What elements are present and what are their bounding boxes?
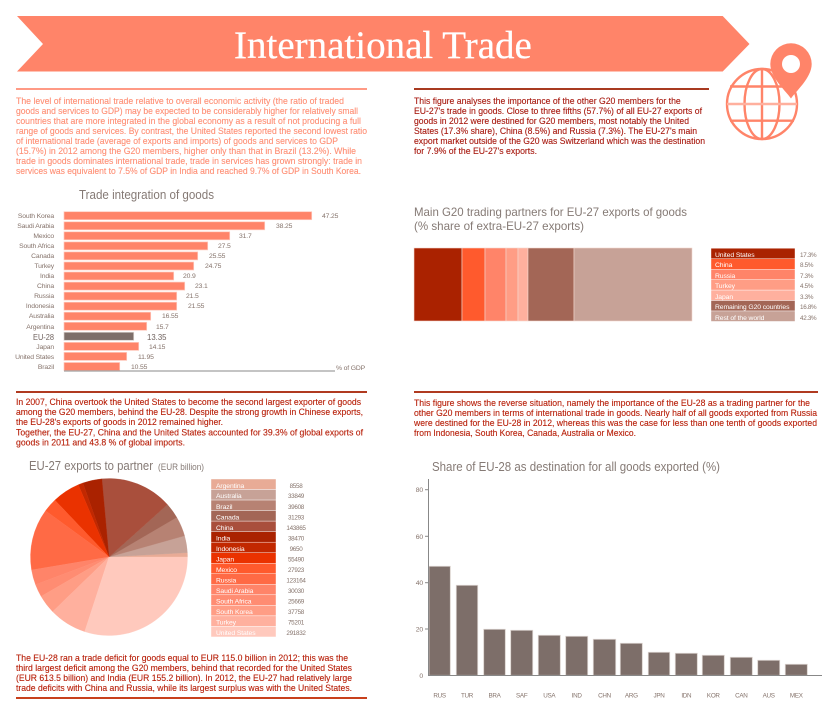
legend: EU-27 exports to partner: South Korea xyxy=(216,609,253,616)
icon: globe with location pin xyxy=(727,43,812,139)
legend: EU-27 exports to partner: China xyxy=(216,525,234,532)
legend: G20 trading partners: Remaining G20 countries xyxy=(715,304,790,311)
legend: G20 trading partners: United States xyxy=(715,252,755,259)
legend: EU-27 exports to partner: Argentina xyxy=(216,483,245,490)
legend: EU-27 exports to partner: Mexico xyxy=(216,567,237,574)
bar chart: trade integration of goods: 16.55 xyxy=(162,313,179,320)
bar chart: trade integration of goods: 27.5 xyxy=(218,243,231,250)
legend: EU-27 exports to partner: 38470 xyxy=(288,536,305,542)
bar chart: trade integration of goods: South Africa xyxy=(19,243,54,250)
bar chart: trade integration of goods: 25.55 xyxy=(209,253,226,260)
legend: G20 trading partners: Turkey xyxy=(715,283,736,290)
panel: intro text left: The level of international trade relative to overall economic activity (the ratio of traded xyxy=(16,95,344,106)
bar chart: trade integration of goods: 20.9 xyxy=(183,273,196,280)
panel: intro text left: services was equivalent to 7.5% of GDP in India and reached 9.7% of GDP in South Korea. xyxy=(16,165,361,176)
bar chart: share of EU-28 as destination: 80 xyxy=(416,487,423,494)
bar chart: share of EU-28 as destination: KOR xyxy=(707,692,720,700)
bar chart: trade integration of goods: 21.5 xyxy=(186,293,199,300)
pie chart: EU-27 exports to partner xyxy=(30,478,188,636)
bar chart: share of EU-28 as destination: ARG xyxy=(625,692,638,700)
bar chart: share of EU-28 as destination: AUS xyxy=(763,692,775,700)
legend: G20 trading partners: Russia xyxy=(715,273,735,280)
legend: EU-27 exports to partner: Japan xyxy=(216,556,234,564)
bar chart: share of EU-28 as destination: 20 xyxy=(416,626,423,634)
bar chart: trade integration of goods: 13.35 xyxy=(147,332,167,342)
legend: EU-27 exports to partner: 25669 xyxy=(288,598,305,606)
panel: intro text left: goods and services to GDP) may be expected to be considerably higher for relatively small xyxy=(16,105,358,116)
bar chart: trade integration of goods: 11.95 xyxy=(138,354,154,361)
bar chart: trade integration of goods: 23.1 xyxy=(195,283,208,290)
bar chart: trade integration of goods: 31.7 xyxy=(239,233,252,240)
bar chart: trade integration of goods: South Korea xyxy=(18,213,54,220)
legend: EU-27 exports to partner: Indonesia xyxy=(216,546,245,553)
panel: intro text right: States (17.3% share), China (8.5%) and Russia (7.3%). The EU-27's main xyxy=(414,125,697,136)
panel: intro text right: EU-27's trade in goods. Close to three fifths (57.7%) of all EU-27 exports of xyxy=(414,105,702,116)
stacked bar: G20 trading partners xyxy=(414,248,692,321)
panel: intro text right xyxy=(414,88,709,156)
heading: share of EU-28 chart: Share of EU-28 as destination for all goods exported (%) xyxy=(432,460,720,474)
bar chart: share of EU-28 as destination: IND xyxy=(572,692,582,700)
legend: G20 trading partners: 3.3% xyxy=(800,294,814,301)
legend: G20 trading partners: Japan xyxy=(715,294,733,301)
legend: G20 trading partners xyxy=(711,248,817,322)
heading: EU-27 exports pie chart: EU-27 exports to partner xyxy=(29,458,154,473)
bar chart: share of EU-28 as destination: 60 xyxy=(416,534,423,541)
panel: intro text left: (15.7%) in 2012 among the G20 members, higher only than that in Brazil (13.2%). While xyxy=(16,145,356,156)
bar chart: share of EU-28 as destination: TUR xyxy=(461,692,474,700)
legend: EU-27 exports to partner: 27923 xyxy=(288,567,305,574)
legend: EU-27 exports to partner: Russia xyxy=(216,578,236,584)
panel: China text: In 2007, China overtook the United States to become the second largest exporter of goods xyxy=(16,396,361,407)
panel: trade deficit text: (EUR 613.5 billion) and India (EUR 155.2 billion). In 2012, the EU-27 had relatively large xyxy=(16,672,352,683)
bar chart: share of EU-28 as destination: JPN xyxy=(654,692,665,700)
panel: China text: among the G20 members, behind the EU-28. Despite the strong growth in Chinese exports, xyxy=(16,406,363,417)
bar chart: trade integration of goods: EU-28 xyxy=(33,332,54,342)
legend: EU-27 exports to partner: 123164 xyxy=(286,578,306,584)
panel: China text: Together, the EU-27, China and the United States accounted for 39.3% of global exports of xyxy=(16,426,363,438)
bar chart: trade integration of goods: Russia xyxy=(34,293,54,300)
bar chart: share of EU-28 as destination: 40 xyxy=(416,580,423,587)
panel: reverse situation text xyxy=(413,391,818,438)
legend: G20 trading partners: China xyxy=(715,262,733,269)
bar chart: share of EU-28 as destination: SAF xyxy=(516,692,528,700)
panel: intro text right: for 7.9% of the EU-27's exports. xyxy=(414,145,537,156)
bar chart: share of EU-28 as destination: USA xyxy=(543,692,556,700)
panel: intro text left: range of goods and services. By contrast, the United States reported the second lowest ratio xyxy=(16,125,367,136)
legend: EU-27 exports to partner: 75201 xyxy=(288,620,305,626)
bar chart: trade integration of goods: Turkey xyxy=(34,263,55,270)
panel: trade deficit text xyxy=(16,652,367,699)
panel: intro text left: of international trade (average of exports and imports) of goods and services to GDP xyxy=(16,135,338,146)
legend: EU-27 exports to partner: 291832 xyxy=(286,630,306,637)
legend: G20 trading partners: 4.5% xyxy=(800,283,814,290)
bar chart: trade integration of goods: Argentina xyxy=(26,324,54,331)
panel: intro text left: trade in goods dominates international trade, trade in services has grown strongly: trade in xyxy=(16,155,362,166)
bar chart: share of EU-28 as destination: CAN xyxy=(735,692,748,700)
panel: intro text right: This figure analyses the importance of the other G20 members for the xyxy=(414,95,681,106)
panel: trade deficit text: third largest deficit among the G20 members, behind that recorded for the United States xyxy=(16,662,352,673)
title: International Trade xyxy=(234,24,532,67)
legend: G20 trading partners: 7.3% xyxy=(800,273,814,280)
legend: EU-27 exports to partner: 39608 xyxy=(288,504,305,511)
legend: G20 trading partners: Rest of the world xyxy=(715,315,765,322)
panel: intro text right: export market outside of the G20 was Switzerland which was the destination xyxy=(414,135,705,146)
panel: intro text left xyxy=(16,88,367,176)
bar chart: trade integration of goods: Indonesia xyxy=(26,303,54,310)
legend: EU-27 exports to partner: Turkey xyxy=(216,620,237,626)
legend: EU-27 exports to partner: 30030 xyxy=(288,588,305,595)
heading: main trading partners chart: Main G20 trading partners for EU-27 exports of goods xyxy=(414,205,687,219)
panel: intro text right: goods in 2012 were destined for G20 members, most notably the United xyxy=(414,115,689,126)
bar chart: trade integration of goods: United States xyxy=(15,354,55,361)
legend: EU-27 exports to partner: 143865 xyxy=(286,525,306,532)
bar chart: share of EU-28 as destination: BRA xyxy=(488,692,502,700)
title banner xyxy=(17,16,750,72)
bar chart: trade integration of goods: % of GDP xyxy=(336,365,366,372)
bar chart: trade integration of goods: 47.25 xyxy=(322,213,339,220)
bar chart: share of EU-28 as destination: CHN xyxy=(598,692,612,700)
bar chart: trade integration of goods: 38.25 xyxy=(276,223,293,230)
legend: EU-27 exports to partner: Australia xyxy=(216,493,242,500)
bar chart: trade integration of goods: Mexico xyxy=(33,233,54,240)
bar chart: trade integration of goods: 24.75 xyxy=(205,263,222,270)
panel: China text: the EU-28's exports of goods in 2012 remained higher. xyxy=(16,416,223,427)
bar chart: trade integration of goods: 21.55 xyxy=(188,303,205,310)
panel: China text xyxy=(16,391,367,448)
panel: intro text left: countries that are more integrated in the global economy as a result of not producing a full xyxy=(16,115,361,126)
legend: EU-27 exports to partner: 9650 xyxy=(290,546,303,553)
bar chart: share of EU-28 as destination: 0 xyxy=(419,673,423,680)
heading: trade integration chart: Trade integration of goods xyxy=(79,188,214,202)
bar chart: share of EU-28 as destination: MEX xyxy=(790,692,804,700)
legend: G20 trading partners: 17.3% xyxy=(800,252,817,259)
panel: reverse situation text: from Indonesia, South Korea, Canada, Australia or Mexico. xyxy=(414,427,636,438)
legend: EU-27 exports to partner: 55490 xyxy=(288,556,305,564)
bar chart: trade integration of goods: 10.55 xyxy=(131,364,148,371)
legend: EU-27 exports to partner: Brazil xyxy=(216,504,233,511)
panel: China text: goods in 2011 and 43.8 % of global imports. xyxy=(16,436,185,448)
legend: G20 trading partners: 8.5% xyxy=(800,262,814,269)
bar chart: trade integration of goods xyxy=(15,212,366,372)
legend: EU-27 exports to partner: United States xyxy=(216,630,256,637)
bar chart: trade integration of goods: Canada xyxy=(31,253,54,260)
panel: trade deficit text: The EU-28 ran a trade deficit for goods equal to EUR 115.0 billion in 2012; this was the xyxy=(16,652,348,663)
legend: EU-27 exports to partner: South Africa xyxy=(216,598,252,606)
heading: main trading partners chart xyxy=(414,205,687,233)
bar chart: trade integration of goods: India xyxy=(40,273,54,280)
legend: EU-27 exports to partner: Canada xyxy=(216,514,240,522)
legend: G20 trading partners: 42.3% xyxy=(800,315,817,322)
legend: EU-27 exports to partner: 33849 xyxy=(288,493,305,500)
heading: main trading partners chart: (% share of extra-EU-27 exports) xyxy=(414,219,584,233)
bar chart: trade integration of goods: China xyxy=(37,283,54,290)
bar chart: trade integration of goods: 14.15 xyxy=(149,344,166,351)
legend: EU-27 exports to partner xyxy=(211,479,306,637)
bar chart: share of EU-28 as destination xyxy=(416,479,822,700)
bar chart: share of EU-28 as destination: IDN xyxy=(681,692,692,700)
bar chart: trade integration of goods: Brazil xyxy=(38,364,55,371)
legend: G20 trading partners: 16.8% xyxy=(800,304,817,311)
panel: trade deficit text: trade deficits with China and Russia, while its largest surplus was with the United States. xyxy=(16,682,352,693)
legend: EU-27 exports to partner: Saudi Arabia xyxy=(216,588,254,595)
heading: EU-27 exports pie chart: (EUR billion) xyxy=(158,462,204,472)
bar chart: trade integration of goods: Japan xyxy=(36,344,54,351)
bar chart: trade integration of goods: Saudi Arabia xyxy=(17,223,54,230)
legend: EU-27 exports to partner: India xyxy=(216,536,231,542)
bar chart: trade integration of goods: 15.7 xyxy=(156,324,169,331)
legend: EU-27 exports to partner: 37758 xyxy=(288,609,305,616)
legend: EU-27 exports to partner: 31293 xyxy=(288,514,305,522)
bar chart: share of EU-28 as destination: RUS xyxy=(433,692,446,700)
legend: EU-27 exports to partner: 8558 xyxy=(290,483,303,490)
bar chart: trade integration of goods: Australia xyxy=(29,313,54,320)
panel: reverse situation text: This figure shows the reverse situation, namely the importance of the EU-28 as a trading partner for the xyxy=(414,397,810,408)
